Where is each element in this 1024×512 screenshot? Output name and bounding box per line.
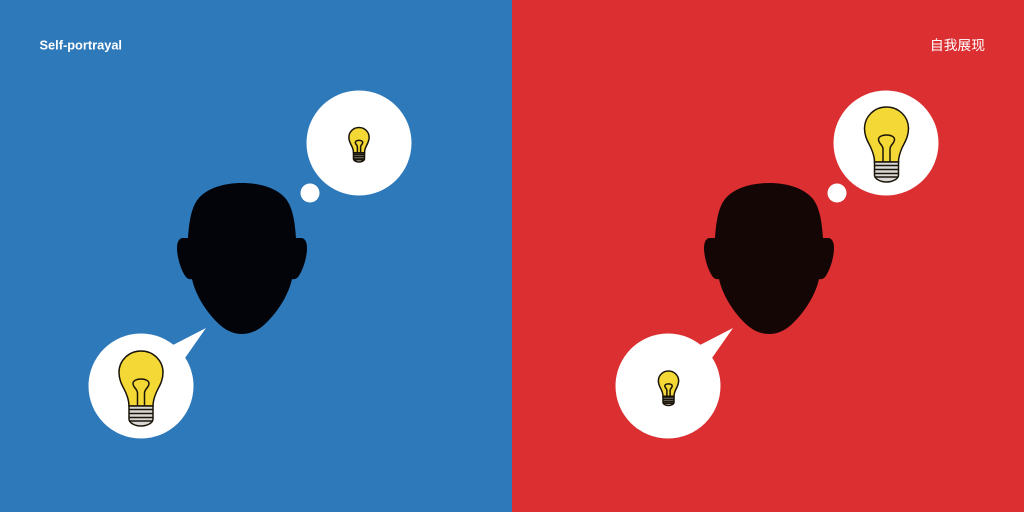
icon: small light bulb [349, 128, 369, 162]
icon: small light bulb [658, 371, 679, 406]
icon: large light bulb [864, 107, 908, 182]
icon: large light bulb [119, 351, 163, 426]
speech bubble with small bulb [616, 328, 733, 438]
thought bubble with small bulb [300, 90, 412, 202]
panel: blue self-portrayal side [0, 0, 512, 512]
thought bubble with large bulb [828, 90, 938, 202]
speech bubble with large bulb [88, 328, 206, 438]
panel: red self-portrayal side [512, 0, 1024, 512]
heading: Chinese title: 自我展现 [930, 38, 985, 53]
head silhouette: red panel [704, 183, 834, 334]
heading: Self-portrayal: Self-portrayal [40, 38, 122, 52]
head silhouette: blue panel [177, 183, 307, 334]
